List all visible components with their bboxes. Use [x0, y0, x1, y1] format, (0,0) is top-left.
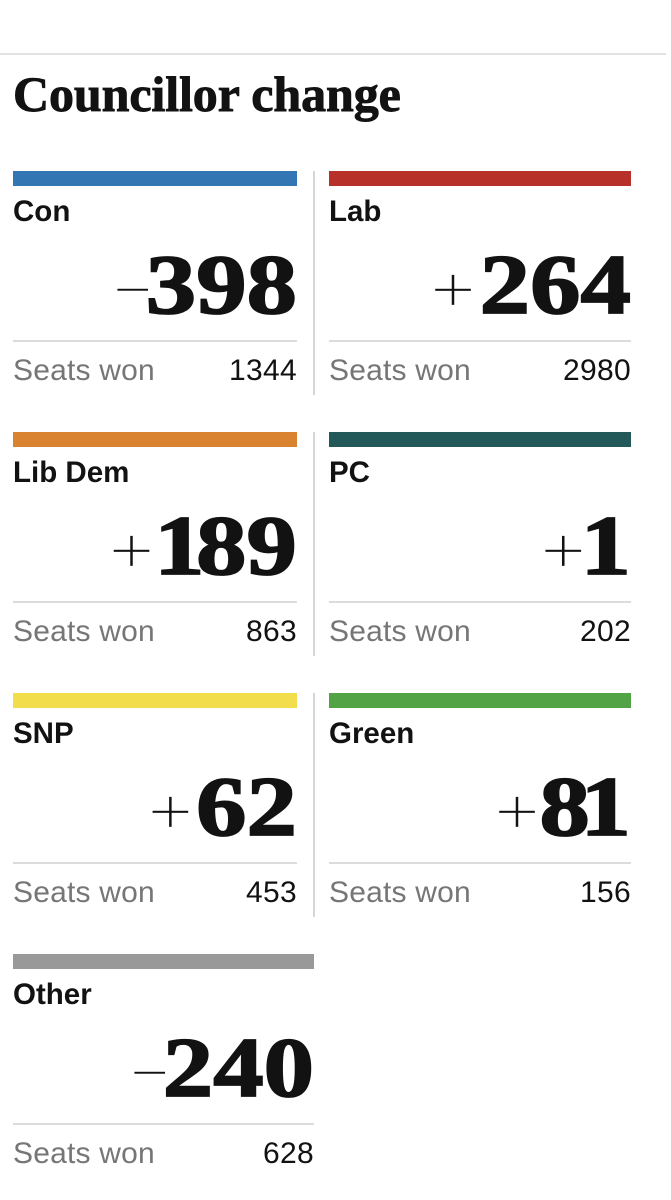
panel: SNP: Seats won — [13, 876, 155, 909]
panel: Lab: 2980 — [563, 354, 631, 387]
panel: Lab — [329, 171, 631, 387]
panel: Green: +81 — [495, 759, 631, 853]
panel: Other: 628 — [263, 1137, 314, 1170]
panel: Lib Dem: 863 — [246, 615, 297, 648]
panel: Lib Dem: Seats won — [13, 615, 155, 648]
panel: Green: Seats won — [329, 876, 471, 909]
panel: PC — [329, 432, 631, 648]
panel: Con — [13, 171, 297, 387]
panel: Green: 156 — [580, 876, 631, 909]
panel: Green: Green — [329, 717, 414, 750]
panel: Green — [329, 693, 631, 909]
panel: Con: –398 — [117, 237, 297, 331]
panel: Lab: Lab — [329, 195, 381, 228]
panel: Other: Other — [13, 978, 92, 1011]
panel: SNP: 453 — [246, 876, 297, 909]
panel: Lib Dem: Lib Dem — [13, 456, 129, 489]
panel: Other: Seats won — [13, 1137, 155, 1170]
panel: PC: +1 — [541, 498, 631, 592]
panel: SNP — [13, 693, 297, 909]
panel: Other — [13, 954, 314, 1170]
panel: Lab: +264 — [431, 237, 631, 331]
panel: PC: PC — [329, 456, 370, 489]
panel: Lab: Seats won — [329, 354, 471, 387]
panel: Con: Con — [13, 195, 70, 228]
panel: Con: 1344 — [229, 354, 297, 387]
title: Councillor change — [13, 66, 401, 122]
panel: PC: 202 — [580, 615, 631, 648]
panel: Other: –240 — [134, 1020, 314, 1114]
panel: SNP: SNP — [13, 717, 74, 750]
panel: SNP: +62 — [148, 759, 297, 853]
panel: PC: Seats won — [329, 615, 471, 648]
panel: Lib Dem: +189 — [109, 498, 297, 592]
panel: Lib Dem — [13, 432, 297, 648]
panel: Con: Seats won — [13, 354, 155, 387]
